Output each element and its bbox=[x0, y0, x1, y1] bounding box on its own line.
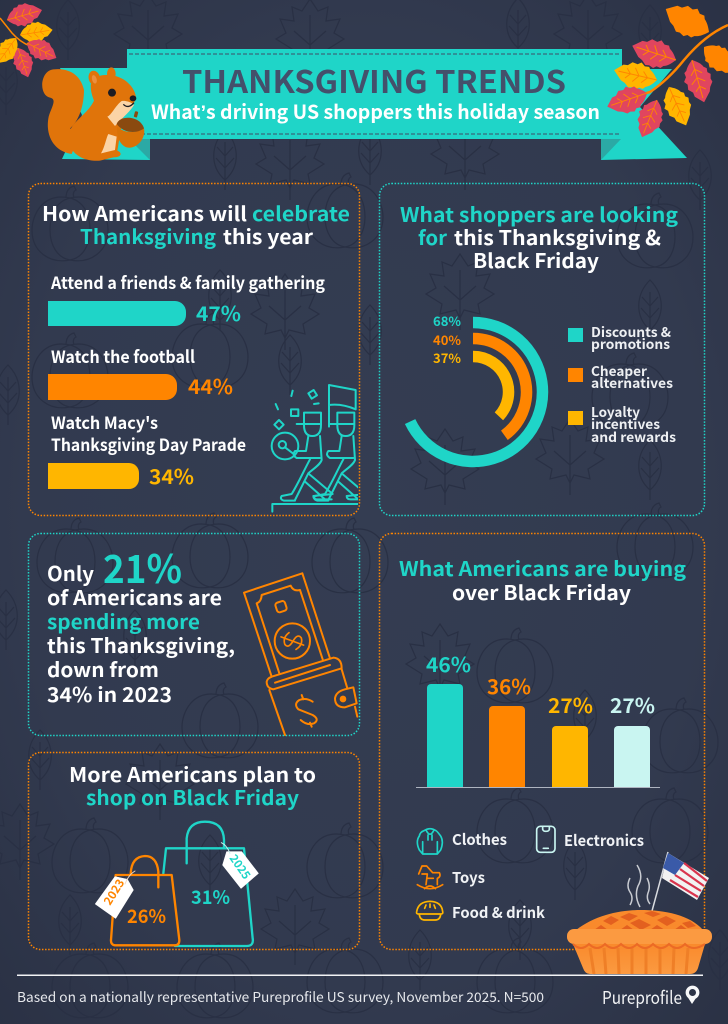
ribbon left tail bbox=[60, 68, 150, 160]
legend: shoppers: Discounts & bbox=[591, 321, 671, 341]
legend: purchase categories bbox=[417, 826, 644, 923]
icon: rocking horse bbox=[417, 866, 443, 889]
heading: Black Friday plans: shop on Black Friday bbox=[86, 782, 300, 811]
icon: shopping bag 2023 26%: 26% bbox=[127, 902, 166, 929]
footer bbox=[17, 974, 703, 1010]
bar: football 44% bbox=[48, 343, 233, 400]
bar: gathering 47%: 47% bbox=[196, 298, 241, 327]
icon: shopping bag 2025 31%: 31% bbox=[191, 883, 230, 910]
heading: celebrate: this year bbox=[223, 221, 313, 250]
heading: shoppers: this Thanksgiving & bbox=[454, 222, 661, 251]
header banner bbox=[60, 49, 687, 160]
icon: wallet with banknote bbox=[244, 573, 357, 735]
icon: phone bbox=[537, 826, 555, 852]
stat text: of Americans are bbox=[47, 582, 222, 611]
decoration: leaves top left bbox=[0, 0, 61, 80]
bar chart: 46% bbox=[426, 649, 471, 678]
heading: shoppers bbox=[400, 199, 678, 274]
icon: hoodie bbox=[417, 829, 442, 854]
bar chart: 27% bbox=[610, 690, 655, 719]
heading: celebrate: Thanksgiving bbox=[80, 221, 216, 250]
bar: parade 34%: Thanksgiving Day Parade bbox=[51, 431, 246, 456]
legend: shoppers: promotions bbox=[591, 333, 670, 353]
stat text bbox=[47, 539, 235, 708]
heading: buying: What Americans are buying bbox=[399, 553, 686, 582]
heading: celebrate: celebrate bbox=[252, 198, 350, 227]
radial chart: 40% bbox=[433, 330, 461, 349]
legend: shoppers bbox=[568, 321, 676, 446]
legend: shoppers: Cheaper bbox=[591, 360, 647, 380]
illustration: pie with flag bbox=[567, 852, 712, 974]
stat text: Only bbox=[47, 558, 95, 587]
panel: only 21% spending more bbox=[28, 534, 360, 736]
legend: shoppers: incentives bbox=[591, 413, 660, 433]
subtitle: What’s driving US shoppers this holiday season bbox=[151, 96, 600, 125]
radial chart: 68% bbox=[433, 311, 461, 330]
heading: Black Friday plans: More Americans plan to bbox=[69, 759, 316, 788]
bar: gathering 47%: Attend a friends & family gathering bbox=[50, 269, 325, 294]
heading: buying: over Black Friday bbox=[452, 577, 632, 606]
heading: Black Friday plans bbox=[69, 759, 316, 811]
stat text: down from bbox=[47, 654, 159, 683]
panel: shop on Black Friday bbox=[28, 752, 360, 950]
legend: shoppers: and rewards bbox=[591, 426, 676, 446]
heading: shoppers: Black Friday bbox=[473, 245, 600, 274]
radial chart: 37% bbox=[433, 348, 461, 367]
heading: celebrate: How Americans will bbox=[42, 198, 247, 227]
stat text: 21% bbox=[103, 539, 182, 595]
icon: shopping bag 2023 26%: 2023 bbox=[100, 876, 128, 908]
legend: shoppers: Loyalty bbox=[591, 401, 640, 421]
bar: football 44%: Watch the football bbox=[51, 343, 195, 368]
icon: squirrel with acorn bbox=[42, 67, 144, 161]
bar: parade 34% bbox=[48, 409, 246, 490]
bar chart: 36% bbox=[487, 671, 531, 700]
legend: purchase categories: Toys bbox=[452, 867, 485, 888]
steam bbox=[628, 865, 650, 907]
panel: what shoppers are looking for bbox=[380, 184, 704, 516]
icon: parade marchers bbox=[272, 385, 366, 512]
bar: gathering 47% bbox=[48, 269, 325, 327]
stat text: spending more bbox=[47, 606, 200, 635]
stat text: this Thanksgiving, bbox=[47, 630, 235, 659]
legend: purchase categories: Electronics bbox=[564, 830, 644, 851]
panel: what Americans are buying bbox=[380, 534, 704, 950]
heading: buying bbox=[399, 553, 686, 606]
legend: purchase categories: Clothes bbox=[452, 829, 507, 850]
stat text: 34% in 2023 bbox=[47, 679, 172, 708]
radial chart bbox=[410, 311, 542, 462]
heading: shoppers: What shoppers are looking bbox=[400, 199, 678, 228]
ribbon main bbox=[127, 49, 622, 139]
heading: celebrate bbox=[42, 198, 350, 250]
source note: Based on a nationally representative Pureprofile US survey, November 2025. N=500 bbox=[17, 986, 544, 1006]
icon: shopping bag 2023 26% bbox=[95, 856, 179, 945]
bar: parade 34%: 34% bbox=[149, 461, 194, 490]
icon: shopping bag 2025 31%: 2025 bbox=[226, 851, 254, 883]
legend: purchase categories: Food & drink bbox=[452, 902, 545, 923]
legend: shoppers: alternatives bbox=[591, 372, 673, 392]
icon: pie bbox=[417, 901, 443, 920]
icon: shopping bag 2025 31% bbox=[163, 822, 258, 946]
ribbon right tail bbox=[601, 69, 687, 160]
bar chart bbox=[416, 649, 660, 788]
panel: how Americans will celebrate bbox=[28, 184, 366, 516]
bar: football 44%: 44% bbox=[188, 371, 233, 400]
logo: Pureprofile: Pureprofile bbox=[602, 985, 682, 1010]
bar chart: 27% bbox=[548, 690, 593, 719]
title: THANKSGIVING TRENDS bbox=[182, 57, 566, 102]
decoration: leaves top right bbox=[603, 0, 728, 142]
bar: parade 34%: Watch Macy's bbox=[51, 409, 158, 434]
flag bbox=[662, 853, 709, 900]
heading: shoppers: for bbox=[418, 222, 447, 251]
